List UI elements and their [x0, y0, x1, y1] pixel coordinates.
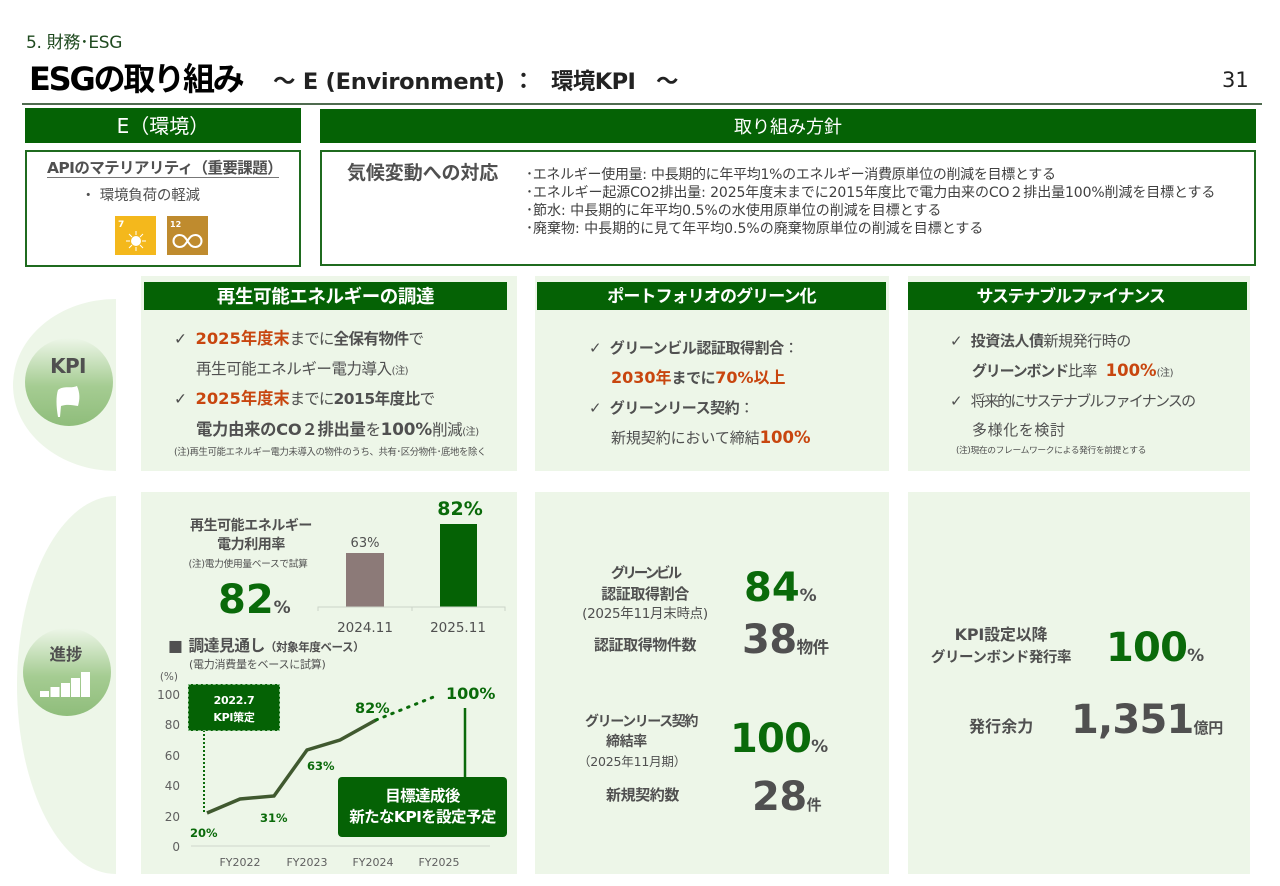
line chart: outlook [157, 671, 495, 869]
outlook heading: ■ 調達見通し（対象年度ベース） [168, 636, 364, 655]
line chart: outlook: 82% [355, 701, 390, 717]
portfolio header [537, 282, 886, 310]
materiality item: ・ 環境負荷の軽減 [81, 188, 200, 204]
panel: renewable progress [141, 492, 517, 874]
icon: flag [56, 386, 80, 417]
green building value: 84% [744, 565, 817, 611]
new contracts value: 28件 [752, 774, 821, 820]
finance text: ✓ 将来的にサステナブルファイナンスの [950, 392, 1194, 410]
header: policy: 取り組み方針 [734, 117, 842, 138]
portfolio text [589, 339, 811, 447]
icon: SDG 7: 7 [118, 220, 124, 230]
header: E [25, 108, 301, 143]
line chart: outlook: (%) [160, 671, 178, 683]
callout: new KPI: 新たなKPIを設定予定 [349, 808, 496, 826]
certified count label: 認証取得物件数 [594, 636, 696, 654]
callout: KPI set: KPI策定 [213, 711, 255, 724]
policy list: ･エネルギー使用量: 中長期的に年平均1%のエネルギー消費原単位の削減を目標とする [526, 167, 1056, 183]
capacity label: 発行余力 [969, 717, 1033, 736]
materiality heading: APIのマテリアリティ（重要課題） [47, 159, 282, 177]
portfolio text: 2030年までに70%以上 [611, 368, 786, 387]
line chart: outlook: 0 [172, 840, 180, 854]
KPI half circle [13, 299, 116, 471]
renewable rate label: 電力利用率 [217, 537, 285, 553]
panel: sustainable finance progress [908, 492, 1250, 874]
green lease value: 100% [730, 716, 827, 762]
progress badge [23, 628, 111, 716]
panel: green portfolio KPI [535, 276, 889, 471]
line chart: outlook: 20% [190, 826, 218, 840]
outlook note: (電力消費量をベースに試算) [189, 658, 326, 671]
line chart: outlook: 40 [165, 779, 180, 793]
portfolio header: ポートフォリオのグリーン化 [607, 287, 816, 307]
line chart: outlook: 100 [157, 688, 180, 702]
panel: sustainable finance KPI [908, 276, 1250, 471]
line chart: outlook: FY2024 [352, 856, 394, 869]
policy list [526, 166, 1215, 237]
green building label [582, 565, 708, 622]
line chart: outlook: FY2023 [286, 856, 328, 869]
panel: materiality [25, 150, 301, 267]
policy list: ･節水: 中長期的に年平均0.5%の水使用原単位の削減を目標とする [526, 203, 941, 219]
subtitle: 環境KPI [551, 69, 635, 95]
renewable note: (注)再生可能エネルギー電力未導入の物件のうち、共有･区分物件･底地を除く [174, 447, 486, 458]
policy list: ･廃棄物: 中長期的に見て年平均0.5%の廃棄物原単位の削減を目標とする [526, 221, 983, 237]
renewable text: 電力由来のCO２排出量を100%削減(注) [196, 419, 479, 439]
panel: policy [320, 150, 1256, 266]
finance header [908, 282, 1247, 310]
portfolio text: ✓ グリーンビル認証取得割合： [589, 339, 798, 357]
new contracts label: 新規契約数 [606, 786, 679, 804]
portfolio text: ✓ グリーンリース契約： [589, 399, 754, 417]
line chart: outlook: 63% [307, 759, 335, 773]
certified count value: 38物件 [742, 617, 829, 663]
renewable header [144, 282, 507, 310]
callout: new KPI [338, 777, 507, 837]
line chart: outlook: 20 [165, 810, 180, 824]
line chart: outlook: 100% [446, 684, 495, 703]
subtitle [273, 69, 678, 95]
title: ESGの取り組み [29, 60, 243, 98]
renewable rate label: 再生可能エネルギー [190, 518, 312, 534]
subtitle: ～ E (Environment) ： [273, 69, 535, 95]
finance text [950, 332, 1195, 439]
green lease label: グリーンリース契約 [585, 714, 697, 730]
green building label: グリーンビル [611, 566, 679, 582]
renewable text: 再生可能エネルギー電力導入(注) [196, 360, 408, 378]
header: E: E（環境） [117, 114, 209, 138]
callout: KPI set [188, 684, 280, 731]
panel: green portfolio progress [535, 492, 889, 874]
green lease label: （2025年11月期） [578, 754, 686, 769]
portfolio text: 新規契約において締結100% [611, 428, 811, 447]
green bond value: 100% [1106, 625, 1203, 671]
renewable text [174, 329, 479, 439]
KPI badge label: KPI [50, 354, 86, 378]
green bond label: KPI設定以降 [955, 625, 1047, 644]
progress badge label: 進捗 [50, 645, 82, 664]
policy list: ･エネルギー起源CO2排出量: 2025年度末までに2015年度比で電力由来のCO２排出量100%削減を目標とする [526, 185, 1215, 201]
renewable rate value: 82% [218, 577, 291, 623]
header: policy [320, 109, 1256, 143]
callout: KPI set: 2022.7 [214, 694, 254, 707]
renewable rate note: (注)電力使用量ベースで試算 [188, 559, 308, 570]
icon: SDG 7 [115, 216, 156, 255]
bar chart: renewable rate: 63% [351, 536, 379, 551]
line chart: outlook: 80 [165, 718, 180, 732]
renewable rate label [190, 518, 312, 553]
renewable text: ✓ 2025年度末までに全保有物件で [174, 329, 424, 348]
green building label: (2025年11月末時点) [582, 606, 708, 622]
finance text: ✓ 投資法人債新規発行時の [950, 332, 1131, 350]
finance text: グリーンボンド比率 100%(注) [972, 361, 1173, 380]
green building label: 認証取得割合 [601, 584, 689, 602]
capacity value: 1,351億円 [1071, 697, 1223, 743]
icon: SDG 12: 12 [170, 220, 181, 229]
green lease label: 締結率 [606, 734, 647, 750]
icon: SDG 12 [167, 216, 208, 255]
finance note: (注)現在のフレームワークによる発行を前提とする [956, 446, 1146, 456]
renewable text: ✓ 2025年度末までに2015年度比で [174, 389, 435, 408]
line chart: outlook: 60 [165, 749, 180, 763]
renewable header: 再生可能エネルギーの調達 [217, 287, 434, 308]
progress half circle [17, 496, 116, 874]
callout: new KPI: 目標達成後 [385, 787, 460, 805]
bar chart: renewable rate: 2025.11 [430, 620, 486, 636]
line chart: outlook: FY2025 [418, 856, 460, 869]
green bond label [931, 625, 1071, 666]
policy heading: 気候変動への対応 [347, 162, 498, 184]
finance text: 多様化を検討 [972, 421, 1066, 439]
line chart: outlook: 31% [260, 811, 288, 825]
subtitle: ～ [656, 69, 678, 95]
KPI badge [25, 338, 113, 426]
title rule [22, 103, 1262, 105]
bar chart: renewable rate: 82% [437, 498, 483, 520]
page number: 31 [1222, 68, 1249, 92]
bar chart: renewable rate: 2024.11 [337, 620, 393, 636]
green lease label [578, 714, 698, 769]
line chart: outlook: FY2022 [219, 856, 261, 869]
icon: bars [40, 672, 90, 697]
bar chart: renewable rate [318, 498, 506, 636]
section label: 5. 財務･ESG [26, 33, 122, 53]
panel: renewable KPI [141, 276, 517, 471]
green bond label: グリーンボンド発行率 [931, 650, 1071, 666]
finance header: サステナブルファイナンス [976, 287, 1164, 307]
